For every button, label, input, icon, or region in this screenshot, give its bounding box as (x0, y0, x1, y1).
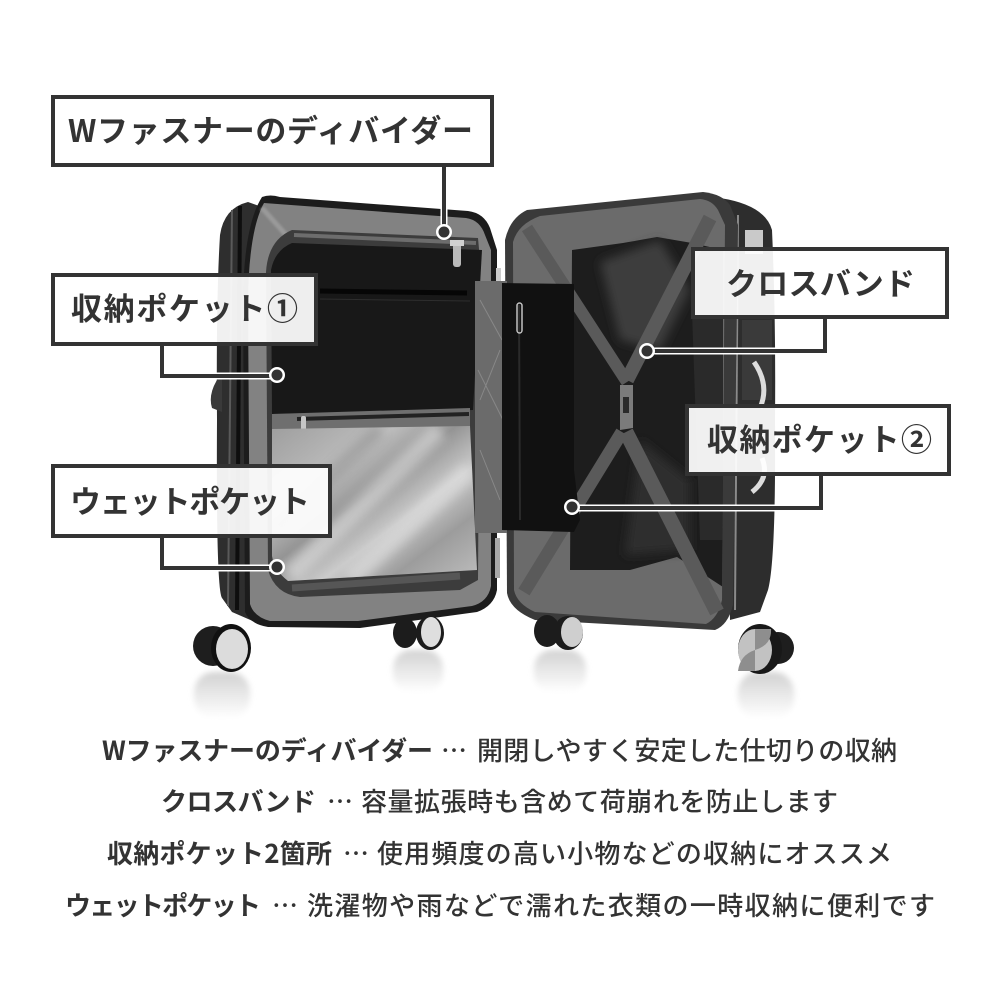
buckle (620, 385, 633, 430)
wheel reflections (194, 650, 794, 718)
description list: 洗濯物や雨などで濡れた衣類の一時収納に便利です (307, 886, 935, 923)
back shell right (720, 198, 775, 620)
left half of suitcase (211, 196, 501, 628)
description list: … (441, 731, 467, 768)
callout: storage pocket 2 (564, 406, 949, 515)
black pouch (502, 283, 580, 532)
divider panel with pouch (475, 281, 580, 533)
right half of suitcase (505, 192, 775, 630)
description list: … (343, 834, 369, 871)
callout: wet pocket (53, 466, 330, 575)
description list: 開閉しやすく安定した仕切りの収納 (477, 731, 897, 768)
description list (65, 731, 935, 923)
top zipper pull (453, 241, 461, 267)
lower zipper band (272, 408, 470, 430)
description list: 容量拡張時も含めて荷崩れを防止します (361, 782, 838, 819)
callout: storage pocket 1: 収納ポケット① (71, 284, 298, 329)
callout: cross band: クロスバンド (726, 259, 915, 304)
callout: storage pocket 1 (53, 275, 316, 383)
front left wheel (193, 626, 233, 666)
rear right wheels (534, 615, 560, 647)
grey divider (475, 281, 507, 533)
front right wheel (762, 632, 794, 664)
silver wet pocket (272, 426, 477, 581)
grey lining (248, 203, 491, 621)
wheels (193, 615, 794, 674)
description list: … (327, 782, 353, 819)
callout: W fastener divider: Wファスナーのディバイダー (68, 106, 473, 151)
pocket zip frame (266, 230, 480, 597)
cross straps (627, 218, 710, 380)
lining base (513, 199, 725, 624)
description list: … (272, 886, 298, 923)
description: cross band: クロスバンド (161, 782, 316, 819)
callout: storage pocket 2: 収納ポケット② (707, 415, 932, 460)
callout: wet pocket: ウェットポケット (70, 477, 310, 522)
black mesh pocket (271, 243, 482, 414)
dark cloth centre (570, 237, 723, 587)
callout: W fastener divider (53, 97, 492, 240)
description list: 使用頻度の高い小物などの収納にオススメ (377, 834, 892, 871)
rear left wheels (393, 618, 417, 648)
outer frame (505, 192, 738, 630)
description: pockets: 収納ポケット2箇所 (107, 834, 332, 871)
description: W fastener: Wファスナーのディバイダー (102, 731, 433, 768)
bottom zipper (292, 576, 460, 588)
description: wet pocket: ウェットポケット (65, 886, 261, 923)
callout: cross band (639, 249, 947, 359)
hinge parts (496, 268, 501, 282)
outer frame (243, 196, 497, 628)
side handle (211, 378, 222, 412)
back shell left (217, 202, 270, 625)
